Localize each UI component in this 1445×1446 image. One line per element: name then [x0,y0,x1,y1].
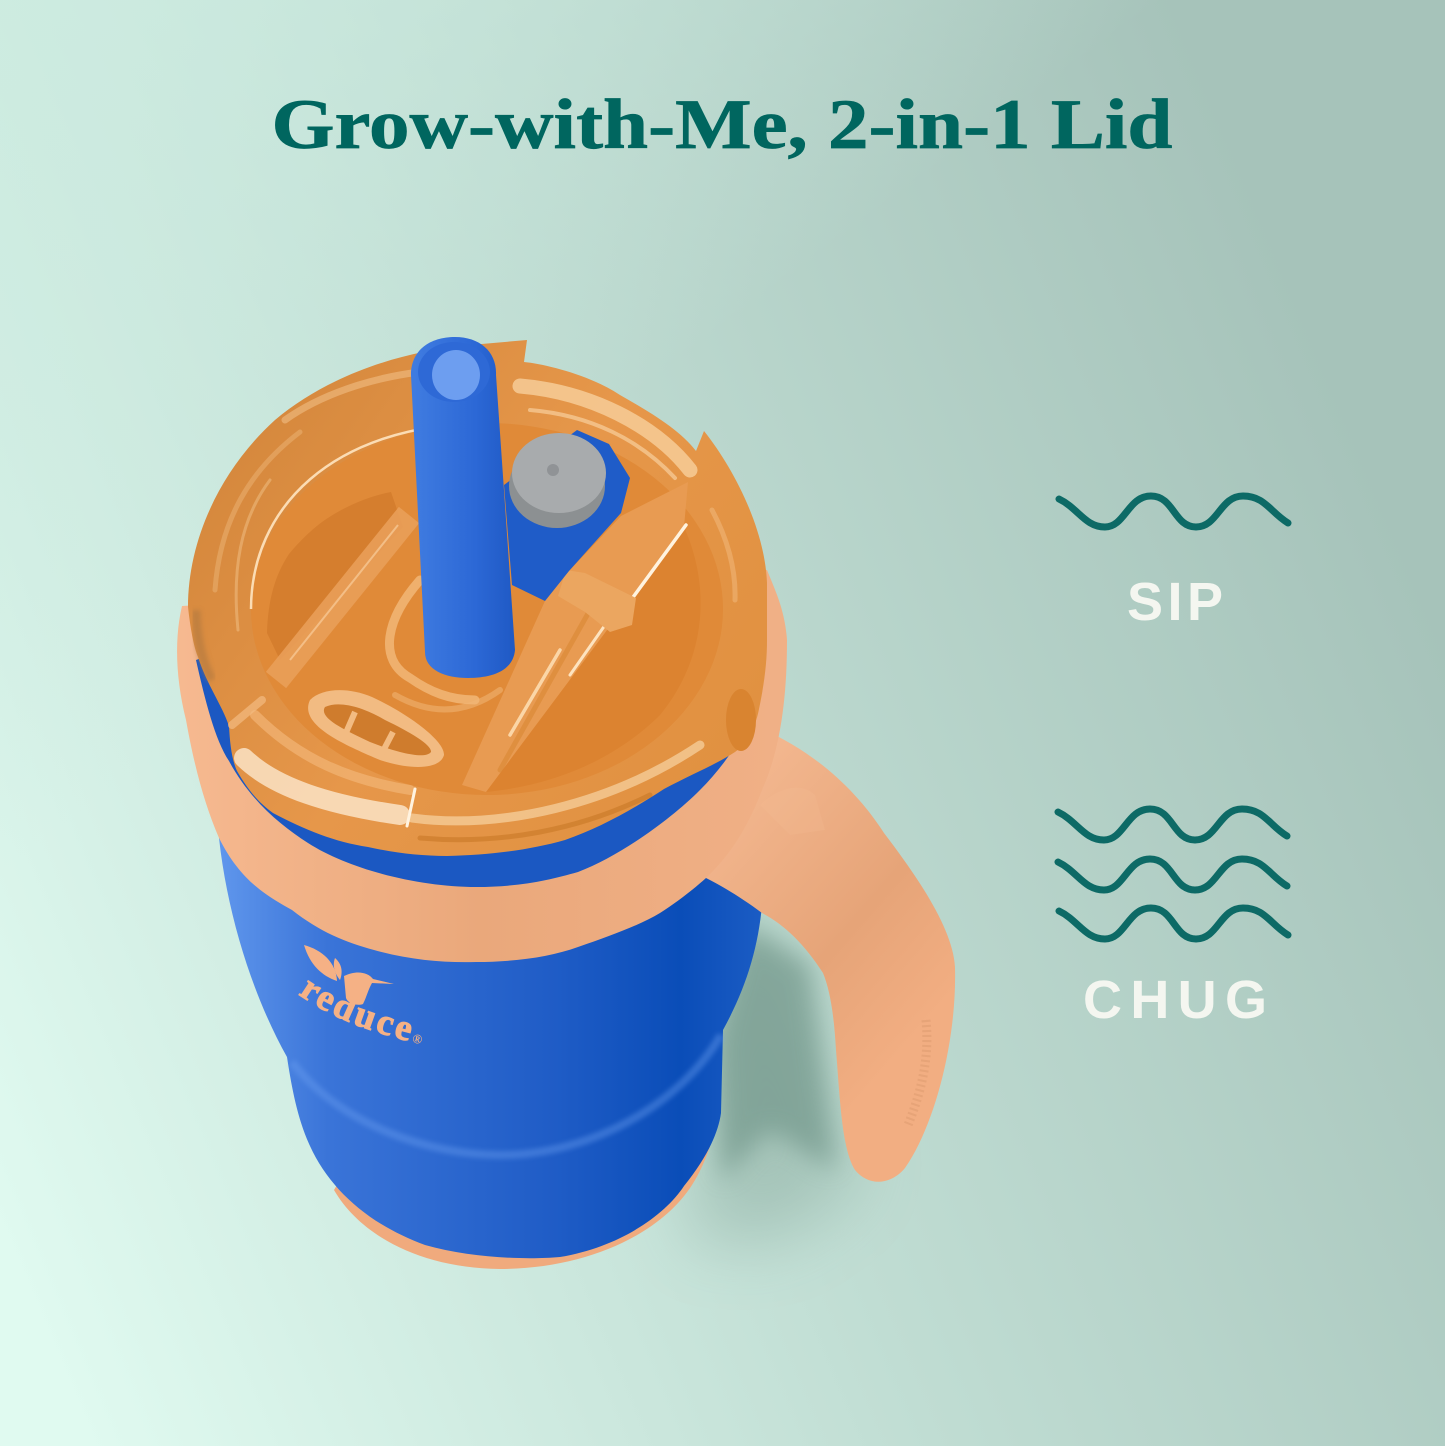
straw [411,337,515,678]
icon: single wave for sip [1059,496,1288,527]
label: chug: CHUG [1083,970,1267,1030]
side hinge bead [726,689,756,751]
handle embossed grip [908,1020,927,1125]
logo wordmark: reduce® [298,980,422,1044]
lid inner flat [251,423,723,795]
right flat panel [486,527,701,792]
left channel ridge [276,515,409,680]
lid outer rim [188,340,767,856]
tumbler base ring [334,1110,720,1269]
front rim highlights [232,700,700,840]
handle [690,722,955,1182]
inner ring highlight [251,423,487,609]
lid dark rim shade [196,610,212,680]
straw socket [389,580,500,709]
body ridge highlight [292,1035,721,1155]
tumbler body [219,838,762,1258]
handle embossed logo [760,788,825,835]
finger loop tab [308,690,444,767]
left flat panel [267,492,403,660]
tumbler illustration [177,337,956,1269]
logo leaves [304,945,394,1005]
slider channel [462,482,688,792]
slider channel highlights [500,525,686,770]
slider knob [558,570,636,632]
label: sip: SIP [1127,572,1223,632]
blue neck band [196,640,760,887]
cast shadow [690,900,860,1240]
grey vent cap [509,433,606,528]
title: Grow-with-Me, 2-in-1 Lid [272,86,1172,164]
lid [188,337,767,856]
icon: triple wave for chug [1058,809,1288,939]
blue vent mount [504,430,630,601]
top rim highlights [215,372,735,630]
collar [177,570,787,962]
